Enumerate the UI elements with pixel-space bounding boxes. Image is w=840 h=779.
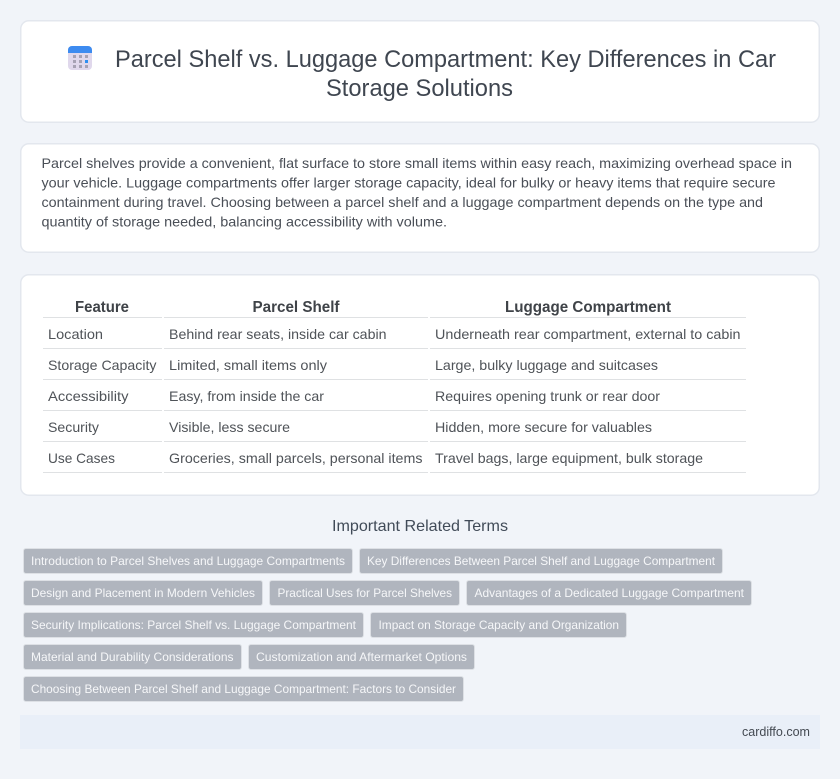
row: use cases: Travel bags, large equipment, bulk storage	[435, 450, 703, 466]
text block: introduction	[42, 155, 792, 230]
row: storage capacity: Large, bulky luggage and suitcases	[435, 357, 658, 373]
tag: Design and Placement in Modern Vehicles	[31, 586, 255, 600]
tag: Introduction to Parcel Shelves and Luggage Compartments	[31, 554, 345, 568]
footer	[20, 715, 820, 749]
row: use cases: Use Cases	[48, 450, 115, 466]
heading: Storage Solutions	[326, 75, 513, 102]
row: security: Security	[48, 419, 99, 435]
tag	[248, 644, 474, 670]
tag: Security Implications: Parcel Shelf vs. Luggage Compartment	[31, 618, 357, 632]
row: storage capacity: Storage Capacity	[48, 357, 156, 373]
tag	[24, 548, 352, 574]
text block: introduction: containment during travel. Choosing between a parcel shelf and a luggage compartment depends on the type and	[42, 194, 763, 210]
related term tags	[24, 548, 752, 702]
tag	[24, 644, 242, 670]
tag	[24, 676, 464, 702]
tag	[24, 612, 364, 638]
text block: introduction: Parcel shelves provide a convenient, flat surface to store small items within easy reach, maximizing overhead space in	[42, 155, 792, 171]
panel: title	[21, 21, 819, 122]
tag: Material and Durability Considerations	[31, 650, 234, 664]
row: security	[48, 419, 652, 435]
row: accessibility: Accessibility	[48, 388, 128, 404]
text block: introduction: your vehicle. Luggage compartments offer larger storage capacity, ideal for bulky or heavy items that require secure	[42, 174, 776, 190]
row: security: Hidden, more secure for valuables	[435, 419, 652, 435]
table header: Parcel Shelf	[252, 299, 340, 316]
tag	[270, 580, 460, 606]
tag	[466, 580, 752, 606]
row: security: Visible, less secure	[169, 419, 290, 435]
row: location: Behind rear seats, inside car cabin	[169, 326, 386, 342]
row: storage capacity: Limited, small items only	[169, 357, 327, 373]
tag	[370, 612, 626, 638]
row: location: Underneath rear compartment, external to cabin	[435, 326, 740, 342]
heading	[115, 46, 776, 102]
table header: Feature	[75, 299, 129, 316]
text block: introduction: quantity of storage needed, balancing accessibility with volume.	[42, 214, 447, 230]
row: use cases	[48, 450, 703, 466]
footer: cardiffo.com	[742, 725, 810, 739]
tag: Practical Uses for Parcel Shelves	[278, 586, 452, 600]
tag: Key Differences Between Parcel Shelf and Luggage Compartment	[367, 554, 716, 568]
row: storage capacity	[48, 357, 658, 373]
heading: Parcel Shelf vs. Luggage Compartment: Key Differences in Car	[115, 46, 776, 73]
panel: comparison table	[21, 275, 819, 495]
tag	[24, 580, 262, 606]
table header: Luggage Compartment	[505, 299, 671, 316]
tag: Choosing Between Parcel Shelf and Luggage Compartment: Factors to Consider	[31, 682, 456, 696]
tag	[360, 548, 722, 574]
row: location: Location	[48, 326, 103, 342]
row: accessibility: Requires opening trunk or rear door	[435, 388, 660, 404]
row: location	[48, 326, 740, 342]
tag: Advantages of a Dedicated Luggage Compartment	[474, 586, 745, 600]
table header	[75, 299, 671, 316]
heading: related terms: Important Related Terms	[332, 518, 508, 535]
panel: introduction	[21, 144, 819, 252]
icon: calendar	[68, 46, 92, 70]
tag: Customization and Aftermarket Options	[256, 650, 467, 664]
tag: Impact on Storage Capacity and Organization	[378, 618, 619, 632]
row: use cases: Groceries, small parcels, personal items	[169, 450, 422, 466]
row: accessibility: Easy, from inside the car	[169, 388, 324, 404]
row: accessibility	[48, 388, 660, 404]
